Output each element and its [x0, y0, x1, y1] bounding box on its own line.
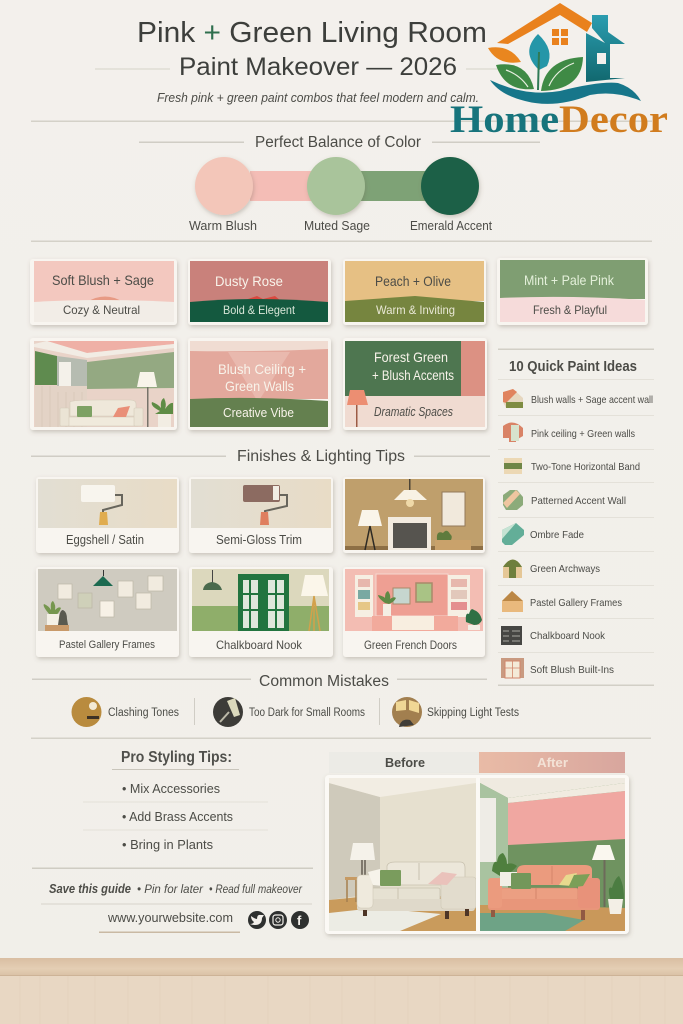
idea 6: [503, 560, 600, 578]
section: perfect balance of color: [139, 134, 540, 233]
title: Pink + Green Living Room: [137, 17, 487, 49]
panel heading: 10 Quick Paint Ideas: [509, 359, 637, 375]
sofa: [357, 862, 476, 919]
before room: [329, 778, 476, 931]
idea 5: [502, 523, 584, 545]
lamp and side table: [345, 843, 375, 902]
card: chalkboard nook: Chalkboard Nook: [216, 638, 303, 652]
card: forest green + blush accents: + Blush Accents: [372, 368, 454, 383]
logo leaves: [488, 34, 583, 91]
tip list: • Mix Accessories: [122, 781, 220, 796]
card: blush ceiling + green walls: Green Walls: [225, 378, 294, 394]
frames: [58, 576, 163, 617]
swatch labels: [189, 219, 492, 233]
mistake: clashing tones: Clashing Tones: [108, 707, 179, 719]
sofa: [372, 616, 458, 631]
card: pastel gallery frames: [36, 567, 179, 657]
heading: Perfect Balance of Color: [255, 134, 421, 151]
plant: [378, 591, 396, 616]
logo house: [586, 15, 625, 82]
icon: twitter: [248, 911, 266, 929]
card: peach + olive: Warm & Inviting: [376, 303, 455, 317]
wall art: [393, 583, 432, 604]
card: mint + pale pink: Mint + Pale Pink: [524, 272, 615, 288]
sofa: [488, 865, 600, 920]
logo wordmark: HomeDecor: [450, 98, 668, 141]
card: peach + olive: Peach + Olive: [375, 273, 451, 289]
card: blush ceiling + green walls: [188, 338, 331, 430]
floor lamp: [358, 510, 382, 550]
save this guide: Save this guide: [49, 882, 131, 896]
idea 4: Patterned Accent Wall: [531, 495, 626, 507]
idea 2: [503, 422, 635, 442]
card: dusty rose: Dusty Rose: [215, 273, 283, 289]
card: dusty rose: Bold & Elegent: [223, 303, 296, 317]
card: green french doors: [343, 567, 485, 657]
mistake: skipping light tests: Skipping Light Tests: [427, 707, 519, 719]
title: Paint Makeover — 2026: [179, 53, 457, 81]
idea 9: Soft Blush Built-Ins: [530, 664, 614, 676]
icon: paint roller: [81, 485, 122, 525]
logo: HomeDecor: [450, 3, 668, 141]
icon: brown paint roller: [243, 485, 287, 525]
heading: finishes & lighting tips: Finishes & Lighting Tips: [237, 448, 405, 465]
idea 7: [502, 591, 622, 612]
mistake: too dark for small rooms: Too Dark for Small Rooms: [249, 707, 365, 719]
card: peach + olive: [343, 259, 486, 325]
card: semi-gloss trim: [189, 477, 333, 553]
card: mint + pale pink: [497, 258, 648, 325]
card: blush ceiling + green walls: Blush Ceiling +: [218, 361, 306, 377]
console with plant: [435, 531, 471, 550]
card: forest green + blush accents: Forest Green: [374, 349, 448, 365]
pro styling tips: [83, 749, 268, 852]
card: dusty rose: [188, 259, 331, 325]
card: soft blush + sage: Cozy & Neutral: [63, 303, 140, 317]
pendant lamp: [394, 479, 427, 507]
sofa: [60, 400, 143, 426]
idea 1: [503, 389, 653, 408]
potted plant: [608, 876, 624, 914]
card: eggshell / satin: [36, 477, 179, 553]
idea 4: [503, 490, 626, 510]
lamp: [592, 845, 615, 907]
card: chalkboard nook: [189, 567, 333, 657]
save this guide: [49, 882, 303, 896]
idea 1: Blush walls + Sage accent wall: [531, 394, 653, 406]
idea 2: Pink ceiling + Green walls: [531, 428, 635, 440]
icon: facebook: f: [297, 913, 302, 928]
pendant: [93, 570, 113, 586]
logo wave: [490, 80, 641, 104]
save this guide: • Pin for later: [137, 882, 204, 896]
card: eggshell / satin: Eggshell / Satin: [66, 533, 144, 547]
idea 9: [501, 658, 614, 678]
tip list: • Add Brass Accents: [122, 809, 233, 824]
mistake: skipping light tests: [392, 697, 519, 727]
floor lamp: [301, 575, 328, 631]
card: soft blush + sage: [30, 259, 177, 325]
card: semi-gloss trim: Semi-Gloss Trim: [216, 533, 302, 547]
panel: before and after: [325, 752, 629, 934]
mistake: clashing tones: [72, 697, 179, 727]
idea 8: Chalkboard Nook: [530, 630, 606, 642]
swatch labels: Muted Sage: [304, 219, 370, 233]
wall frame: [442, 492, 465, 526]
plants: [44, 601, 69, 631]
card: green french doors: Green French Doors: [364, 638, 457, 652]
tip list: [83, 781, 268, 852]
shelves: [355, 575, 470, 617]
plant right: [466, 609, 482, 630]
pendant: [203, 570, 222, 590]
green french doors: [238, 574, 289, 631]
swatch labels: Emerald Accent: [410, 219, 492, 233]
icon: instagram: [269, 911, 287, 929]
card: pastel gallery frames: Pastel Gallery Frames: [59, 639, 155, 651]
idea 8: [501, 626, 606, 645]
save this guide: • Read full makeover: [209, 884, 303, 896]
logo window: [552, 29, 568, 45]
card: forest green + blush accents: Dramatic Spaces: [374, 405, 453, 419]
idea 6: Green Archways: [530, 563, 600, 575]
swatch labels: Warm Blush: [189, 219, 257, 233]
idea 3: [504, 458, 640, 474]
card: mint + pale pink: Fresh & Playful: [533, 303, 607, 317]
before header: [329, 752, 479, 773]
logo roof: [497, 3, 592, 44]
card: soft blush + sage: Soft Blush + Sage: [52, 272, 154, 288]
heading: Pro Styling Tips:: [121, 749, 232, 766]
tv: [388, 517, 431, 550]
wood wainscot: [0, 958, 683, 1024]
idea 5: Ombre Fade: [530, 529, 584, 541]
tip list: • Bring in Plants: [122, 837, 213, 852]
after room: [480, 778, 625, 931]
before header: Before: [385, 755, 425, 770]
panel: 10 quick paint ideas: [498, 348, 654, 686]
card: forest green + blush accents: [343, 338, 487, 430]
title: [95, 17, 498, 81]
section: common mistakes: [32, 673, 519, 727]
card: lighting scene: [343, 477, 485, 553]
idea 7: Pastel Gallery Frames: [530, 597, 622, 609]
idea 3: Two-Tone Horizontal Band: [531, 461, 640, 473]
after header: After: [537, 755, 568, 770]
after header: [479, 752, 625, 773]
website: www.yourwebsite.com: [107, 910, 233, 925]
subtitle: Fresh pink + green paint combos that feel modern and calm.: [157, 90, 479, 105]
card: blush ceiling + green walls: Creative Vibe: [223, 405, 294, 420]
heading: Common Mistakes: [259, 673, 389, 690]
plant: [492, 853, 517, 876]
colour swatches: [195, 157, 479, 215]
social icons: [248, 911, 309, 929]
mistake: too dark for small rooms: [213, 697, 365, 727]
card: room illustration: [30, 338, 177, 430]
